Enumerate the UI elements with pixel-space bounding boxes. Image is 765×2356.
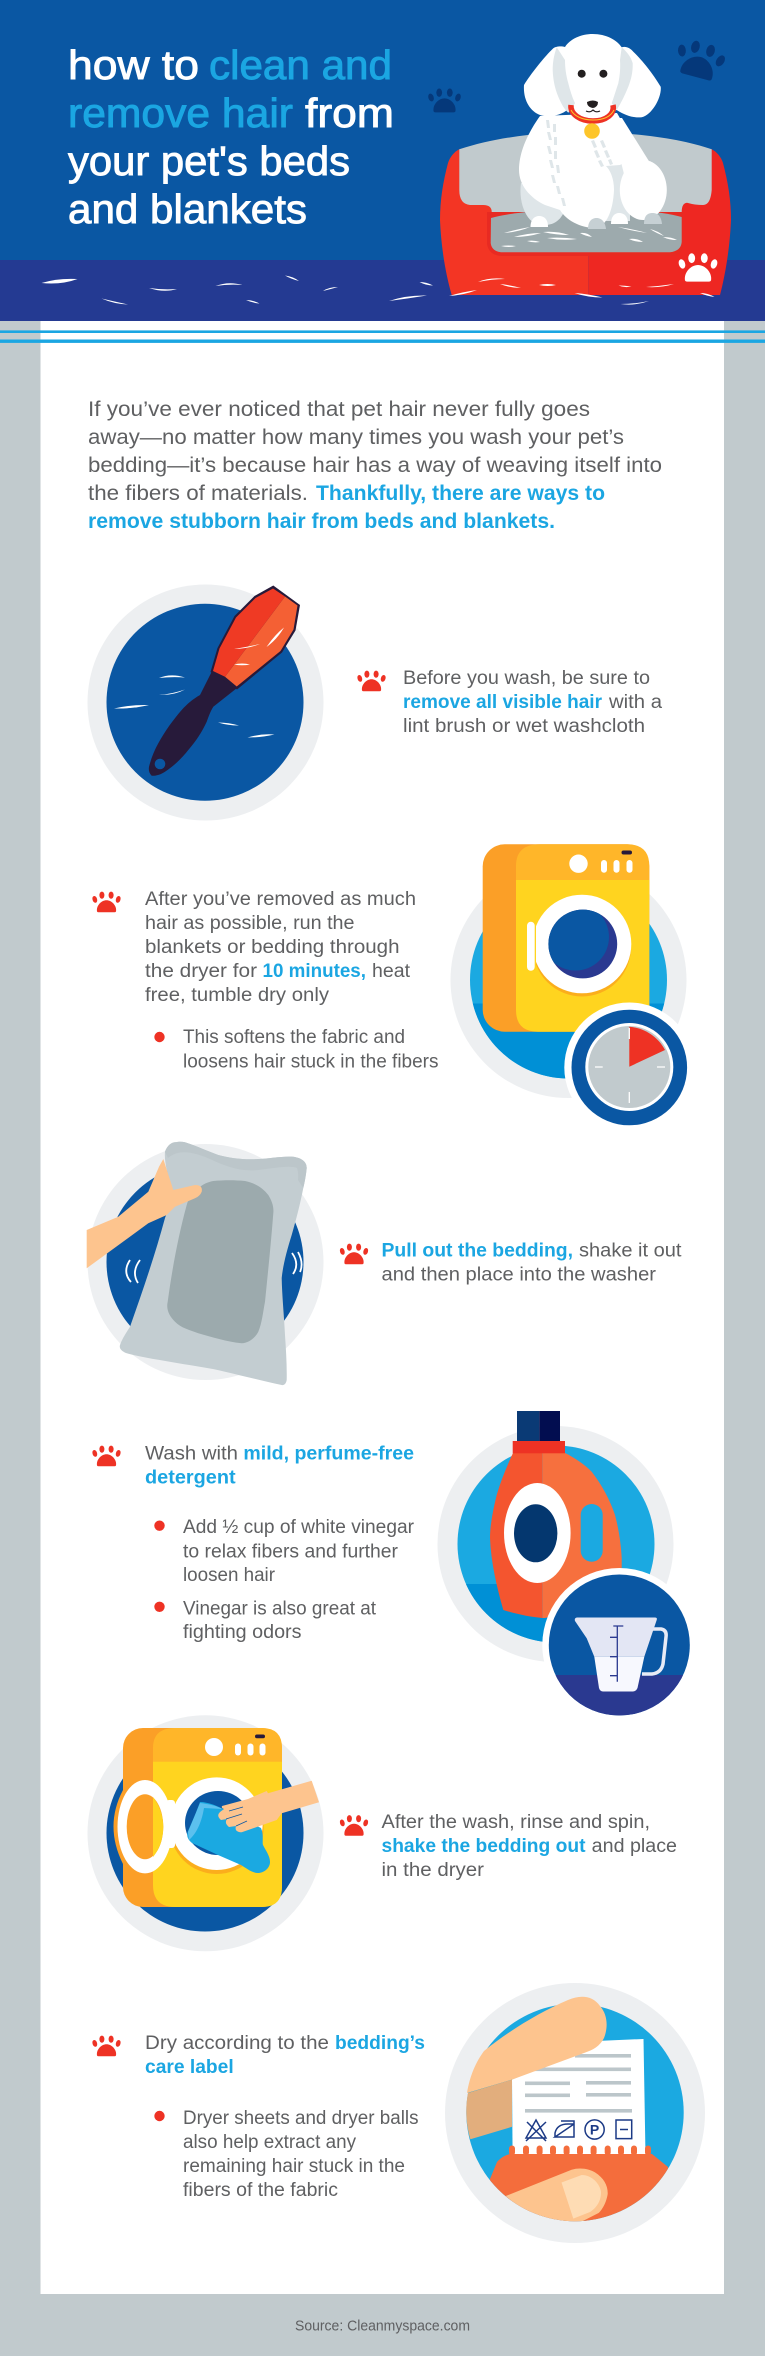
intro paragraph: the fibers of materials. bbox=[88, 482, 308, 505]
blue circle bbox=[106, 1734, 304, 1932]
icon: paw bbox=[339, 1244, 369, 1264]
arm bbox=[467, 1997, 607, 2093]
sleeve bbox=[490, 2154, 668, 2222]
icon: no bleach triangle bbox=[526, 2120, 546, 2141]
icon: paw bbox=[92, 2036, 121, 2056]
bullet: dryer sheets: fibers of the fabric bbox=[183, 2180, 338, 2201]
bottle label centre bbox=[514, 1504, 557, 1562]
timer white ring bbox=[585, 1023, 673, 1111]
bullet: This softens the fabric and bbox=[183, 1027, 405, 1048]
bullet: vinegar bbox=[154, 1517, 415, 1586]
sleeve ribs bbox=[509, 2146, 651, 2156]
cup blue circle bbox=[549, 1574, 690, 1716]
label bbox=[512, 2039, 646, 2156]
rear left haunch bbox=[520, 183, 565, 225]
door bulge bbox=[114, 1790, 123, 1864]
measuring cup bbox=[542, 1568, 696, 1722]
white content panel bbox=[40, 321, 724, 2294]
illustration: white poodle bbox=[519, 34, 667, 229]
step text: the dryer for bbox=[145, 961, 258, 982]
display bbox=[255, 1734, 265, 1738]
mouth bbox=[586, 110, 600, 112]
step 5: shake the bedding out bbox=[88, 1715, 677, 1951]
finger lines bbox=[226, 1807, 247, 1826]
illustration: lint brush bbox=[88, 584, 324, 820]
blue circle bbox=[470, 882, 667, 1078]
opening shadow bbox=[170, 1780, 264, 1874]
dry clean letter: P bbox=[590, 2122, 599, 2138]
step text bbox=[145, 889, 416, 1006]
title: remove hair bbox=[68, 90, 293, 136]
door ring bbox=[533, 895, 631, 993]
step text: in the dryer bbox=[382, 1860, 485, 1881]
thumb bbox=[506, 2168, 608, 2225]
nose bbox=[587, 100, 598, 108]
blue circle bbox=[106, 1164, 304, 1360]
icon: tumble square bbox=[616, 2120, 632, 2139]
brush handle bbox=[149, 672, 237, 776]
step text: blankets or bedding through bbox=[145, 937, 400, 958]
cup water bbox=[594, 1657, 644, 1692]
brush head outline bbox=[210, 586, 300, 690]
grey ring bbox=[88, 1715, 324, 1951]
door shadow bbox=[533, 898, 631, 996]
illustration: shaking bedding bbox=[87, 1142, 324, 1385]
icon: paw bbox=[92, 1446, 121, 1466]
motion arcs bbox=[126, 1252, 302, 1283]
cup handle bbox=[642, 1629, 666, 1674]
door glass half bbox=[153, 1797, 163, 1857]
open door ring bbox=[118, 1780, 172, 1873]
step text: heat bbox=[372, 961, 411, 982]
grey ring bbox=[88, 1144, 324, 1380]
cup circle lower band bbox=[556, 1675, 683, 1716]
illustration: care label bbox=[445, 1983, 705, 2243]
bullet: loosens hair stuck in the fibers bbox=[183, 1052, 438, 1072]
bottle right bbox=[542, 1453, 622, 1618]
blue circle bbox=[466, 2004, 684, 2221]
bedding outer bbox=[120, 1142, 307, 1385]
rear shading bbox=[605, 160, 630, 221]
collar bbox=[571, 105, 613, 121]
blue circle lower tone bbox=[466, 1584, 548, 1642]
dryer side bbox=[483, 844, 649, 1032]
step text: Wash with bbox=[145, 1444, 238, 1464]
bullet: vinegar: to relax fibers and further bbox=[183, 1541, 399, 1562]
brush head red bbox=[213, 588, 285, 677]
step text: Before you wash, be sure to bbox=[403, 668, 650, 689]
bottle label bbox=[504, 1483, 571, 1583]
step text bbox=[403, 668, 662, 737]
bullet: vinegar: loosen hair bbox=[183, 1565, 276, 1586]
step text: After you’ve removed as much bbox=[145, 889, 416, 910]
sleeve and thumb bbox=[490, 2154, 668, 2222]
step text bbox=[145, 2033, 425, 2078]
bedding centre bbox=[167, 1180, 273, 1343]
illustration: detergent and measuring cup bbox=[438, 1411, 696, 1722]
washer top panel bbox=[153, 1728, 282, 1780]
intro paragraph: If you’ve ever noticed that pet hair never fully goes bbox=[88, 398, 590, 421]
illustration: dog bed bbox=[440, 132, 731, 295]
cup white halo bbox=[542, 1568, 696, 1722]
step text: 10 minutes, bbox=[262, 961, 366, 982]
step text: Pull out the bedding, bbox=[382, 1241, 573, 1262]
intro paragraph: bedding—it’s because hair has a way of weaving itself into bbox=[88, 454, 662, 477]
bullet: odors bbox=[154, 1598, 377, 1643]
intro paragraph: away—no matter how many times you wash your pet’s bbox=[88, 426, 624, 449]
brush head orange bbox=[225, 596, 298, 686]
intro paragraph: remove stubborn hair from beds and blankets. bbox=[88, 510, 555, 533]
icon: paw bbox=[92, 892, 121, 912]
bullet: dryer sheets bbox=[154, 2108, 419, 2201]
door glass bbox=[548, 910, 617, 978]
grey ring bbox=[438, 1426, 674, 1662]
buttons bbox=[235, 1744, 266, 1756]
gold tag bbox=[584, 123, 600, 139]
hinge bbox=[527, 922, 535, 971]
bullet: odors: fighting odors bbox=[183, 1622, 302, 1643]
source credit: Source: Cleanmyspace.com bbox=[295, 2318, 470, 2334]
bullet: dryer sheets: remaining hair stuck in the bbox=[183, 2156, 405, 2177]
label text lines bbox=[525, 2054, 632, 2113]
display bbox=[622, 850, 632, 854]
step text: shake it out bbox=[579, 1241, 682, 1262]
right haunch bbox=[620, 160, 667, 220]
bottle cap dark side bbox=[539, 1411, 560, 1441]
step 6: dry per care label bbox=[92, 1983, 705, 2243]
title: from bbox=[305, 90, 394, 136]
paws bbox=[530, 216, 548, 227]
grey ring bbox=[450, 862, 686, 1098]
arm and hand bbox=[87, 1159, 202, 1268]
floor hair strands bbox=[42, 276, 714, 305]
thumbnail bbox=[562, 2175, 601, 2219]
step text: free, tumble dry only bbox=[145, 985, 330, 1006]
bullet: vinegar: Add ½ cup of white vinegar bbox=[183, 1517, 415, 1538]
title: and blankets bbox=[68, 186, 307, 232]
step text: and then place into the washer bbox=[382, 1265, 657, 1286]
bullet bbox=[154, 1027, 439, 1072]
bed outer right bbox=[588, 149, 731, 295]
step 4: wash with detergent bbox=[92, 1411, 696, 1722]
step text bbox=[382, 1241, 682, 1286]
dryer top panel bbox=[516, 844, 649, 900]
intro paragraph: Thankfully, there are ways to bbox=[316, 482, 605, 505]
step text: detergent bbox=[145, 1468, 236, 1488]
icon: small navy paw bbox=[427, 89, 462, 112]
dog body bbox=[519, 113, 640, 228]
title: your pet's beds bbox=[68, 138, 350, 184]
washer side bbox=[123, 1728, 282, 1907]
bed seat shadow bbox=[487, 212, 683, 256]
timer bbox=[564, 1002, 694, 1132]
hinge bbox=[166, 1800, 175, 1848]
arm shaded part bbox=[466, 2080, 512, 2139]
bottle window bbox=[581, 1504, 603, 1562]
icon: iron bbox=[555, 2121, 574, 2137]
step text: remove all visible hair bbox=[403, 692, 603, 713]
timer red wedge bbox=[629, 1027, 665, 1067]
step text: and place bbox=[592, 1836, 677, 1857]
header floor band bbox=[0, 260, 765, 321]
blue circle bbox=[106, 604, 304, 801]
opening interior bbox=[185, 1791, 251, 1855]
step 3: pull out the bedding bbox=[87, 1142, 682, 1385]
step text: lint brush or wet washcloth bbox=[403, 716, 645, 737]
hair strands bbox=[114, 675, 274, 738]
grey ring bbox=[445, 1983, 705, 2243]
bullet: dryer sheets: also help extract any bbox=[183, 2132, 356, 2153]
bullet: dryer sheets: Dryer sheets and dryer balls bbox=[183, 2108, 418, 2129]
step text: bedding’s bbox=[335, 2033, 425, 2054]
illustration: washer with hand bbox=[88, 1715, 324, 1951]
cloth fold bbox=[188, 1803, 222, 1840]
header banner bbox=[0, 0, 765, 321]
dial bbox=[205, 1738, 223, 1756]
title: clean and bbox=[209, 42, 392, 88]
timer ticks bbox=[595, 1028, 665, 1103]
buttons bbox=[601, 860, 632, 873]
step text bbox=[382, 1812, 677, 1881]
arm and hand bbox=[218, 1781, 319, 1832]
brush hole bbox=[155, 759, 165, 769]
illustration: dryer and timer bbox=[450, 844, 694, 1132]
eyes bbox=[578, 70, 586, 78]
step text bbox=[145, 1444, 414, 1488]
icon: paw bbox=[357, 671, 386, 691]
brush hairs bbox=[234, 618, 284, 665]
ear shading right bbox=[612, 47, 633, 110]
icon: large navy paw bbox=[671, 36, 729, 83]
step text: shake the bedding out bbox=[382, 1836, 586, 1857]
step 2: run through dryer bbox=[92, 844, 694, 1132]
header blue background bbox=[0, 0, 765, 260]
hinge gap bbox=[530, 915, 536, 975]
care icons bbox=[526, 2120, 632, 2141]
step text: mild, perfume-free bbox=[243, 1444, 414, 1464]
collar stripe bbox=[571, 110, 614, 120]
step text: Dry according to the bbox=[145, 2033, 329, 2054]
ear shading left bbox=[553, 47, 575, 113]
icon: white paw on bed bbox=[677, 253, 719, 282]
step 1: remove visible hair bbox=[88, 584, 662, 820]
blue circle bbox=[458, 1446, 654, 1642]
icon: dry clean circle bbox=[585, 2120, 604, 2139]
blue cloth bbox=[187, 1802, 270, 1873]
timer face bbox=[588, 1026, 670, 1108]
dryer front bbox=[516, 880, 649, 1032]
dial bbox=[569, 854, 588, 873]
title: how to bbox=[68, 42, 199, 88]
step text: care label bbox=[145, 2057, 234, 2078]
step text: After the wash, rinse and spin, bbox=[382, 1812, 650, 1833]
washer front bbox=[153, 1762, 282, 1907]
open door glass bbox=[127, 1794, 163, 1859]
bullet: odors: Vinegar is also great at bbox=[183, 1598, 377, 1619]
seat hair strands bbox=[501, 227, 677, 247]
title bbox=[68, 42, 394, 232]
double blue divider lines bbox=[0, 330, 765, 343]
blue circle lower tone bbox=[470, 1004, 670, 1084]
bed seat bbox=[491, 209, 682, 252]
timer white halo bbox=[564, 1002, 694, 1132]
timer blue ring bbox=[572, 1010, 687, 1125]
cup upper bbox=[575, 1618, 657, 1657]
intro paragraph bbox=[88, 398, 662, 533]
door glass highlight bbox=[548, 910, 609, 970]
bottle cap bbox=[517, 1411, 539, 1441]
grey ring bbox=[88, 584, 324, 820]
step text: hair as possible, run the bbox=[145, 913, 354, 934]
bottle left bbox=[490, 1453, 542, 1618]
bed back cushion bbox=[459, 132, 712, 225]
bottle neck bbox=[513, 1441, 565, 1453]
fur texture bbox=[546, 120, 613, 206]
icon: paw bbox=[339, 1815, 369, 1836]
bed outer left bbox=[440, 149, 588, 295]
foreleg bbox=[610, 118, 652, 178]
cup ruler bbox=[610, 1626, 623, 1682]
bedding top fold bbox=[165, 1142, 307, 1188]
head and ears bbox=[524, 34, 661, 120]
step text: with a bbox=[608, 692, 662, 713]
opening ring bbox=[171, 1777, 263, 1870]
